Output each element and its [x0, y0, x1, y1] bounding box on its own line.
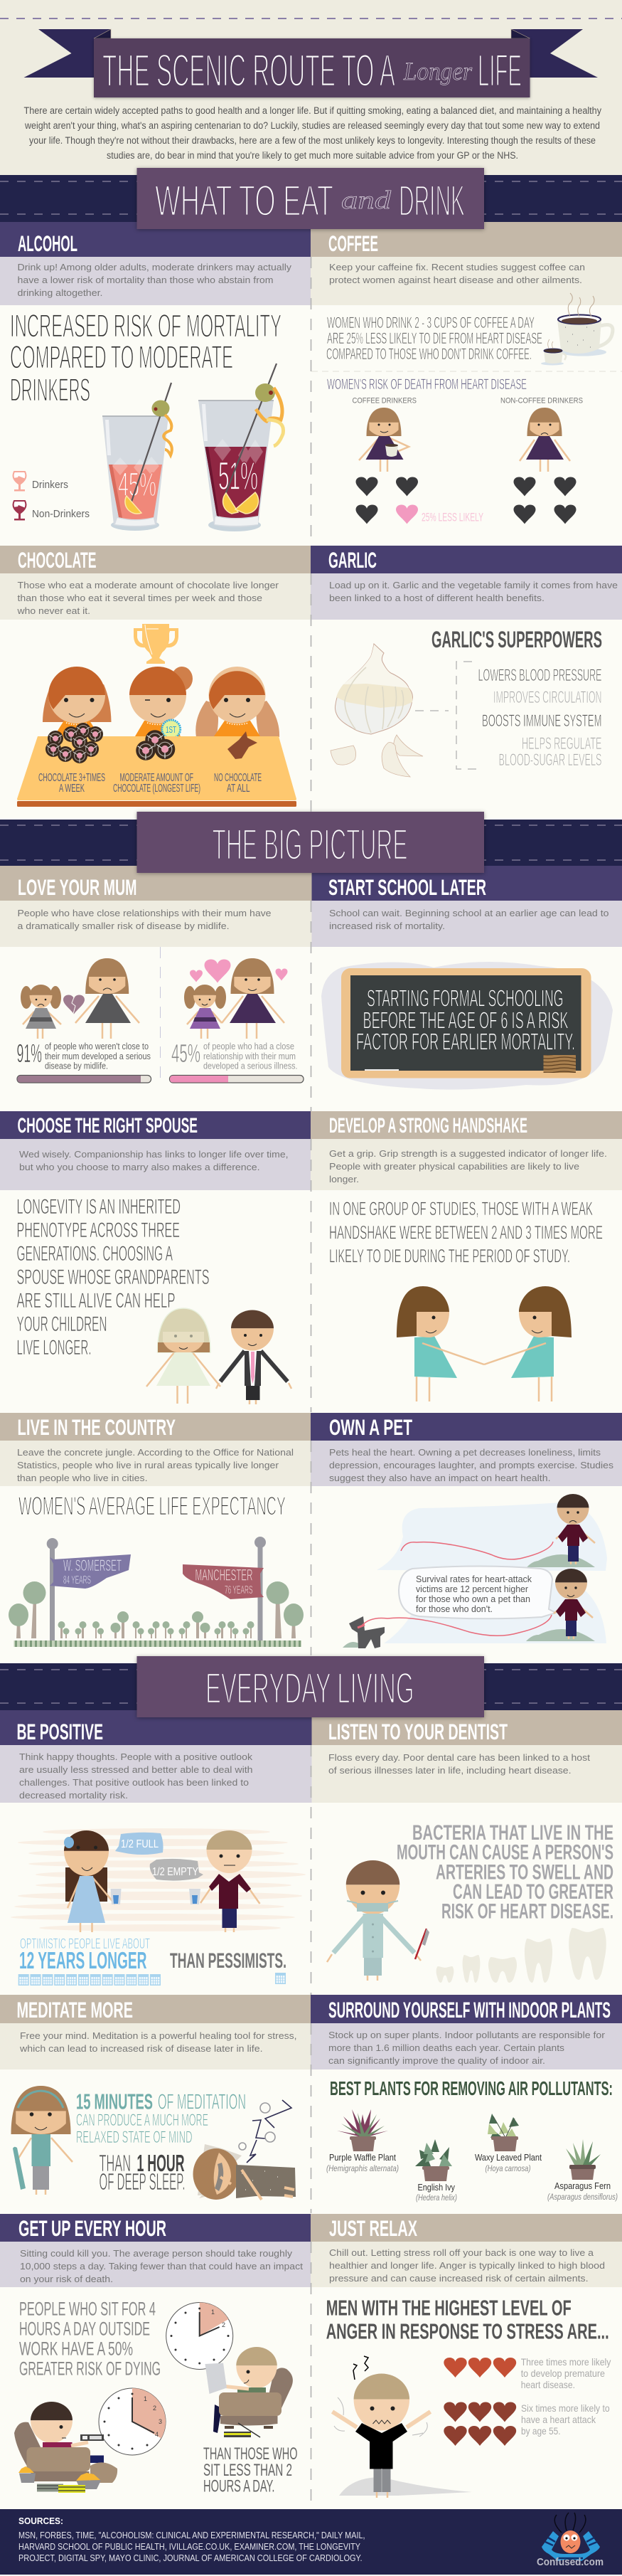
figure: girl with lots of chocolate	[43, 667, 111, 736]
pet description: depression, encourages laughter, and prompts exercise. Studies	[329, 1460, 614, 1470]
spouse description	[19, 1149, 289, 1172]
chocolate description: Those who eat a moderate amount of chocolate live longer	[17, 580, 279, 590]
statistic: 91%: disease by midlife.	[45, 1061, 108, 1071]
speech bubble text	[416, 1574, 532, 1614]
panel: indoor plants	[311, 1995, 622, 2203]
figure: girl shaking hands (right)	[484, 1286, 572, 1401]
longevity text: LONGEVITY IS AN INHERITED	[17, 1195, 181, 1219]
figure: groom	[216, 1310, 291, 1404]
relax description: healthier and longer life. Anger is typically linked to high blood	[329, 2260, 605, 2271]
sitting statistic: WORK HAVE A 50%	[19, 2338, 133, 2359]
plant: waxy leaved: Waxy Leaved Plant	[475, 2152, 542, 2163]
clock: two hours: 2	[222, 2321, 225, 2328]
longevity text	[17, 1195, 209, 1359]
longevity text: SPOUSE WHOSE GRANDPARENTS	[17, 1266, 209, 1289]
section title: EVERYDAY LIVING	[205, 1664, 414, 1712]
heading: pet: OWN A PET	[329, 1414, 412, 1440]
chart: non-drinkers glass 51%	[198, 364, 284, 531]
section band: everyday living	[0, 1656, 622, 1717]
country description	[17, 1447, 294, 1483]
less sitting text: THAN THOSE WHO	[203, 2444, 297, 2464]
chocolate description: who never eat it.	[16, 605, 90, 616]
meditation statistic: OF MEDITATION	[158, 2089, 246, 2114]
chocolate description: than those who eat it several times per week and those	[17, 593, 262, 603]
less sitting text: SIT LESS THAN 2	[203, 2461, 292, 2480]
bar: 45%	[169, 1076, 304, 1083]
meditation statistic: 15 MINUTES	[76, 2089, 153, 2114]
garlic description: Load up on it. Garlic and the vegetable family it comes from have	[329, 580, 618, 590]
panel: choose the right spouse	[0, 1111, 311, 1404]
table labels: MODERATE AMOUNT OF	[119, 772, 193, 784]
footer	[0, 2509, 622, 2575]
section band: what to eat and drink: DRINK	[399, 176, 465, 225]
panel: be positive	[0, 1710, 311, 1986]
pet description: Pets heal the heart. Owning a pet decreases loneliness, limits	[329, 1447, 601, 1458]
figure: happy man with dog	[526, 1569, 595, 1641]
sign post: West Somerset 84 years: W. SOMERSET	[63, 1557, 122, 1574]
table labels	[38, 772, 262, 795]
meditation statistic: THAN	[100, 2150, 131, 2176]
statistic: 91%: their mum developed a serious	[45, 1051, 151, 1061]
plants description	[328, 2030, 606, 2066]
icon: chocolate wrapper	[227, 731, 257, 759]
speech bubble text: for those who own a pet than	[416, 1594, 530, 1604]
longevity text: YOUR CHILDREN	[17, 1313, 107, 1336]
meditate description: Free your mind. Meditation is a powerful healing tool for stress,	[20, 2030, 297, 2041]
figure: girl shaking hands (left)	[397, 1286, 484, 1401]
spouse description: Wed wisely. Companionship has links to longer life over time,	[19, 1149, 289, 1160]
heading: dentist: LISTEN TO YOUR DENTIST	[328, 1719, 508, 1744]
positive description: challenges. That positive outlook has been linked to	[19, 1777, 249, 1788]
text: three times: to develop premature	[521, 2368, 605, 2379]
text: six times: by age 55.	[521, 2425, 560, 2437]
plant: english ivy	[415, 2139, 457, 2203]
header area background	[0, 0, 622, 175]
handshake statistic	[329, 1198, 603, 1266]
garlic description: been linked to a host of different health benefits.	[329, 593, 545, 603]
speech bubble: half empty: 1/2 EMPTY	[152, 1866, 198, 1878]
sign post: Manchester 76 years: MANCHESTER	[195, 1567, 253, 1584]
alcohol description: Drink up! Among older adults, moderate drinkers may actually	[17, 262, 292, 272]
less sitting text	[203, 2444, 297, 2496]
statistic: 45%: of people who had a close	[203, 1041, 294, 1051]
table labels: A WEEK	[59, 783, 85, 795]
heading: chocolate: CHOCOLATE	[18, 547, 97, 573]
sitting statistic: GREATER RISK OF DYING	[19, 2358, 161, 2379]
figure: angry man	[333, 2356, 472, 2498]
chart: drinkers glass 45%: 45%	[118, 465, 156, 503]
panel: meditate more	[0, 1995, 311, 2200]
figure: meditating girl with yoga mat	[11, 2086, 73, 2195]
longevity text: LIVE LONGER.	[17, 1336, 91, 1359]
panel: love your mum	[0, 866, 311, 1083]
coffee description: Keep your caffeine fix. Recent studies suggest coffee can	[329, 262, 585, 272]
country description: Leave the concrete jungle. According to the Office for National	[17, 1447, 294, 1458]
icon: empty leash	[401, 1542, 553, 1559]
plant: asparagus fern	[547, 2139, 618, 2202]
figure: non-coffee girl	[520, 408, 570, 472]
relax description: Chill out. Letting stress roll off your back is one way to live a	[329, 2247, 594, 2258]
title ribbon: LIFE	[478, 45, 522, 96]
intro paragraph	[24, 105, 601, 161]
table	[17, 736, 296, 807]
title: Longer	[403, 57, 473, 85]
statistic: 91%: 91%	[17, 1039, 42, 1068]
sources list	[18, 2530, 365, 2563]
icon: garlic bulb	[335, 644, 412, 734]
school description: increased risk of mortality.	[329, 921, 445, 931]
sign post: Manchester 76 years	[183, 1537, 266, 1645]
statistic: 45%: developed a serious illness.	[203, 1061, 297, 1071]
figure: man watching tv in armchair	[14, 2402, 117, 2493]
heading: country: LIVE IN THE COUNTRY	[17, 1414, 176, 1440]
panel: alcohol	[0, 222, 311, 531]
text: six times: have a heart attack	[521, 2414, 596, 2425]
panel: listen to your dentist	[311, 1710, 622, 1983]
longevity text: PHENOTYPE ACROSS THREE	[17, 1219, 180, 1242]
bar: 91%	[17, 1076, 151, 1083]
figure: man reading in armchair	[205, 2347, 293, 2437]
sources list: PROJECT, DIGITAL SPY, MAYO CLINIC, JOURNAL OF AMERICAN COLLEGE OF CARDIOLOGY.	[18, 2553, 363, 2563]
speech bubble text: victims are 12 percent higher	[416, 1584, 528, 1594]
heading: be positive: BE POSITIVE	[17, 1719, 103, 1744]
logo: confused.com	[537, 2513, 604, 2568]
pet description	[329, 1447, 614, 1483]
statistic: 91%: of people who weren't close to	[45, 1041, 149, 1051]
figure: winner girl	[129, 667, 193, 736]
clock: four hours: 3	[159, 2418, 162, 2425]
figure: pessimistic man	[189, 1830, 260, 1932]
intro paragraph: studies are, do bear in mind that you're likely to get much more suitable advice from your GP or the NHS.	[107, 150, 518, 161]
figure: sad man without pet	[527, 1494, 595, 1567]
sign post: West Somerset 84 years	[47, 1538, 131, 1645]
panel: coffee	[311, 222, 622, 524]
chalkboard text	[356, 985, 575, 1054]
positive description: decreased mortality risk.	[19, 1790, 128, 1801]
sources list: MSN, FORBES, TIME, "ALCOHOLISM: CLINICAL AND EXPERIMENTAL RESEARCH," DAILY MAIL,	[18, 2530, 365, 2540]
trees	[9, 1581, 304, 1638]
panel: develop a strong handshake	[311, 1111, 622, 1401]
speech bubble: half full	[115, 1833, 163, 1855]
section title: and	[341, 186, 392, 214]
speech bubble: half empty	[150, 1859, 203, 1881]
dentist description: Floss every day. Poor dental care has been linked to a host	[328, 1752, 590, 1763]
text: three times	[521, 2356, 611, 2390]
section title: WHAT TO EAT	[155, 176, 333, 225]
mortality heading: COMPARED TO MODERATE	[10, 339, 233, 376]
longevity text: ARE STILL ALIVE CAN HELP	[17, 1289, 175, 1313]
coffee description	[329, 262, 585, 285]
handshake description: People with greater physical capabilities are likely to live	[329, 1161, 579, 1172]
grass strip	[14, 1641, 301, 1647]
figure: girl with no chocolate	[195, 667, 279, 737]
figure: happy mother and child	[184, 958, 284, 1039]
meditation statistic: OF DEEP SLEEP.	[100, 2168, 185, 2195]
panel: own a pet	[311, 1413, 622, 1648]
longevity text: GENERATIONS. CHOOSING A	[17, 1242, 173, 1266]
dentist description	[328, 1752, 590, 1776]
background blobs	[377, 1502, 607, 1643]
icon: non-drinkers glass legend: Non-Drinkers	[32, 508, 90, 520]
mortality heading: DRINKERS	[10, 371, 90, 408]
handshake description	[329, 1148, 607, 1184]
heading: get up: GET UP EVERY HOUR	[18, 2215, 166, 2241]
chart: non-drinkers glass 51%: 51%	[218, 453, 258, 498]
table labels: CHOCOLATE (LONGEST LIFE)	[113, 783, 200, 795]
get up description: on your risk of death.	[20, 2274, 113, 2284]
get up description: Sitting could kill you. The average person should take roughly	[20, 2248, 293, 2259]
section title: THE BIG PICTURE	[212, 820, 408, 869]
panel: start school later	[311, 866, 622, 1090]
icon: broken heart	[63, 995, 85, 1014]
speech bubble text: for those who don't.	[416, 1604, 493, 1614]
table labels: AT ALL	[227, 783, 250, 795]
icon: large coffee mug	[557, 293, 613, 356]
figure: dentist	[327, 1860, 429, 1981]
statistic: 45%: relationship with their mum	[203, 1051, 296, 1061]
label: 25% less likely: 25% LESS LIKELY	[422, 511, 483, 524]
hearts: coffee drinkers	[355, 477, 418, 524]
coffee description: protect women against heart disease and other ailments.	[329, 275, 582, 285]
figure: sad mother and child	[21, 958, 139, 1039]
country description: than people who live in cities.	[17, 1473, 148, 1483]
less sitting text: HOURS A DAY.	[203, 2477, 274, 2496]
sign post: West Somerset 84 years: 84 YEARS	[63, 1574, 91, 1586]
icons: teeth	[436, 1928, 606, 1983]
school description	[329, 908, 608, 931]
chart: drinkers glass 45%	[102, 383, 172, 531]
text: six times: Six times more likely to	[521, 2402, 610, 2414]
superpowers list	[478, 666, 601, 770]
heading: start school later: START SCHOOL LATER	[328, 874, 486, 900]
love your mum description: a dramatically smaller risk of disease by midlife.	[17, 921, 229, 931]
icon: calendar, pessimists	[275, 1973, 286, 1984]
dentist description: of serious illnesses later in life, including heart disease.	[328, 1765, 572, 1776]
hearts: three times	[444, 2358, 516, 2378]
optimistic statistic	[19, 1935, 286, 1973]
plant: asparagus fern: Asparagus Fern	[554, 2180, 611, 2191]
life expectancy heading: WOMEN'S AVERAGE LIFE EXPECTANCY	[18, 1491, 286, 1521]
pet description: suggest they also have an impact on heart health.	[329, 1473, 550, 1483]
heading: love your mum: LOVE YOUR MUM	[18, 874, 136, 900]
clock: two hours	[166, 2302, 233, 2369]
plant: purple waffle: (Hemigraphis alternata)	[326, 2163, 399, 2173]
icon: drinkers glass legend: Drinkers	[32, 479, 68, 491]
figure: sleeping girl	[193, 2144, 296, 2200]
alcohol description: drinking altogether.	[17, 287, 102, 298]
panel: garlic	[311, 546, 622, 777]
heading: coffee: COFFEE	[328, 230, 378, 256]
alcohol description	[17, 262, 292, 298]
clock: four hours: 2	[153, 2405, 156, 2412]
panel: live in the country	[0, 1413, 311, 1647]
positive description: Think happy thoughts. People with a positive outlook	[19, 1751, 253, 1762]
label: non-coffee drinkers: NON-COFFEE DRINKERS	[500, 397, 583, 406]
bacteria text	[397, 1821, 613, 1924]
positive description	[19, 1751, 253, 1801]
icon: dog and leash	[343, 1615, 552, 1648]
school description: School can wait. Beginning school at an earlier age can lead to	[329, 908, 608, 918]
garlic description	[329, 580, 618, 603]
sitting statistic: HOURS A DAY OUTSIDE	[19, 2318, 150, 2339]
love your mum description: People who have close relationships with their mum have	[17, 908, 272, 918]
figure: bride	[146, 1308, 220, 1404]
anger heading	[326, 2295, 609, 2343]
heading: alcohol: ALCOHOL	[18, 230, 77, 256]
optimistic statistic: 12 YEARS LONGER	[19, 1947, 147, 1973]
heading: meditate: MEDITATE MORE	[17, 1997, 133, 2023]
sitting statistic: PEOPLE WHO SIT FOR 4	[19, 2298, 156, 2319]
text: six times	[521, 2402, 610, 2437]
logo: confused.com: Confused.com	[537, 2556, 604, 2568]
chocolate description	[16, 580, 279, 616]
statistic: 91%	[17, 1039, 151, 1071]
meditate description: which can lead to increased risk of disease later in life.	[19, 2043, 262, 2054]
plant: purple waffle: Purple Waffle Plant	[329, 2152, 396, 2163]
section band: the big picture	[0, 812, 622, 873]
get up description	[20, 2248, 303, 2284]
panel: just relax	[311, 2214, 622, 2498]
sources list: HARVARD SCHOOL OF PUBLIC HEALTH, IVILLAGE.CO.UK, EXAMINER.COM, THE LONGEVITY	[18, 2541, 360, 2552]
figure: optimistic girl	[64, 1830, 121, 1932]
mortality heading	[10, 307, 281, 408]
sign post: Manchester 76 years: 76 YEARS	[225, 1584, 253, 1596]
sitting statistic	[19, 2298, 161, 2379]
handshake description: Get a grip. Grip strength is a suggested indicator of longer life.	[329, 1148, 607, 1159]
panel: get up every hour	[0, 2214, 311, 2496]
plant: english ivy: English Ivy	[418, 2182, 455, 2193]
chocolates: heap	[45, 723, 103, 763]
speech bubble text: Survival rates for heart-attack	[416, 1574, 532, 1584]
meditate description	[19, 2030, 297, 2054]
title ribbon	[24, 29, 598, 97]
plant: purple waffle	[326, 2109, 399, 2173]
hearts: six times	[444, 2402, 516, 2446]
clock: four hours: 4	[155, 2431, 159, 2438]
mortality heading: INCREASED RISK OF MORTALITY	[10, 307, 281, 344]
icon: trophy	[134, 624, 178, 664]
figure: coffee drinking girl	[359, 408, 409, 472]
spouse description: but who you choose to marry also makes a difference.	[19, 1162, 259, 1172]
love your mum description	[17, 908, 272, 931]
plant: waxy leaved	[475, 2114, 542, 2173]
plants description: Stock up on super plants. Indoor pollutants are responsible for	[328, 2030, 606, 2040]
icon: garlic cloves	[331, 735, 423, 777]
get up description: 10,000 steps a day. Taking fewer than that could have an impact	[20, 2261, 303, 2272]
icon: pink hearts	[190, 959, 287, 983]
icons: calendars, twelve years	[18, 1974, 161, 1986]
statistic: 45%: 45%	[171, 1039, 200, 1068]
optimistic statistic: THAN PESSIMISTS.	[170, 1949, 286, 1973]
text: three times: Three times more likely	[521, 2356, 611, 2368]
heading: just relax: JUST RELAX	[329, 2215, 417, 2241]
clock: two hours: 1	[211, 2309, 215, 2316]
meditation statistic: 1 HOUR	[136, 2150, 185, 2176]
speech bubble: half full: 1/2 FULL	[121, 1838, 159, 1850]
positive description: are usually less stressed and better able to deal with	[19, 1764, 252, 1775]
handshake description: longer.	[329, 1174, 359, 1184]
chocolates: moderate	[136, 730, 175, 760]
meditation statistic: RELAXED STATE OF MIND	[76, 2128, 192, 2147]
relax description: pressure and can cause increased risk of certain ailments.	[329, 2273, 589, 2284]
coffee statistic text	[326, 314, 542, 363]
icon: non-drinkers glass legend	[13, 501, 90, 521]
section band: what to eat and drink	[0, 168, 622, 229]
statistic: 45%	[171, 1039, 297, 1071]
table labels: NO CHOCOLATE	[214, 772, 262, 784]
plants description: more than 1.6 million deaths each year. Certain plants	[328, 2042, 565, 2053]
plants description: can significantly improve the quality of indoor air.	[328, 2055, 545, 2066]
meditation statistic: CAN PRODUCE A MUCH MORE	[76, 2111, 208, 2130]
speech bubble	[399, 1567, 556, 1618]
table labels: CHOCOLATE 3+TIMES	[38, 772, 105, 784]
heading: garlic: GARLIC	[328, 547, 377, 573]
label: coffee drinkers: COFFEE DRINKERS	[353, 397, 417, 406]
meditation statistic	[76, 2089, 246, 2195]
plant: waxy leaved: (Hoya carnosa)	[485, 2163, 531, 2173]
hearts: non-coffee drinkers	[513, 477, 576, 524]
plant: english ivy: (Hedera helix)	[416, 2193, 457, 2203]
heading: spouse: CHOOSE THE RIGHT SPOUSE	[17, 1114, 198, 1138]
icon: first place rosette	[162, 720, 181, 738]
sources heading: SOURCES:	[18, 2516, 63, 2526]
relax description	[329, 2247, 605, 2284]
optimistic statistic: OPTIMISTIC PEOPLE LIVE ABOUT	[20, 1935, 150, 1952]
peach brush background	[11, 1828, 306, 1931]
icon: small coffee mug	[541, 339, 566, 366]
panel: chocolate	[0, 546, 311, 807]
icon: first place rosette: 1ST	[166, 724, 176, 735]
clock: four hours: 1	[144, 2395, 147, 2402]
chalkboard	[321, 962, 613, 1090]
clock: four hours	[99, 2388, 166, 2455]
alcohol description: have a lower risk of mortality than those who abstain from	[17, 275, 273, 285]
text: three times: heart disease.	[521, 2379, 575, 2390]
icon: sleep zigzags	[239, 2100, 291, 2163]
icon: drinkers glass legend	[13, 472, 68, 491]
country description: Statistics, people who live in rural areas typically live longer	[17, 1460, 279, 1470]
